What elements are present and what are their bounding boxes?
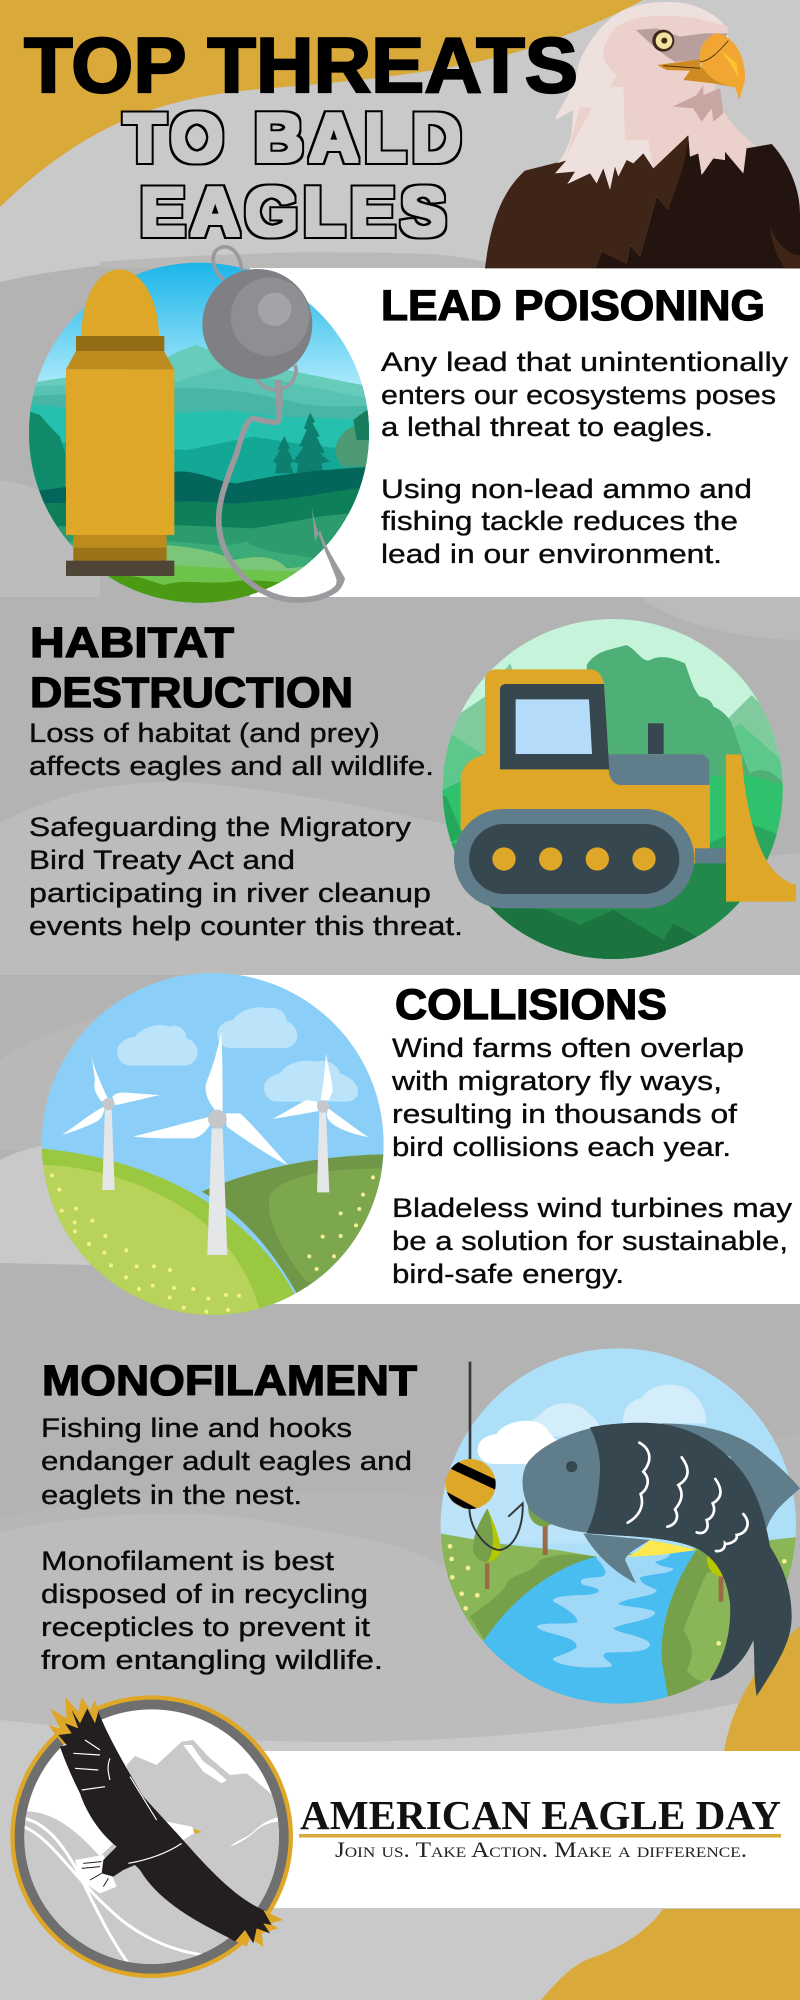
text block: recepticles to prevent it xyxy=(41,1612,371,1642)
text block: disposed of in recycling xyxy=(41,1579,368,1609)
illustration: lead bullet and sinker hook xyxy=(20,247,380,607)
heading: LEAD POISONING xyxy=(381,282,765,330)
turbine blades xyxy=(62,1033,369,1165)
wing highlights xyxy=(73,1740,182,1863)
text block: Bird Treaty Act and xyxy=(29,845,295,875)
fishing hook xyxy=(213,247,345,600)
text block: bird-safe energy. xyxy=(392,1259,624,1289)
logo: american eagle day emblem xyxy=(10,1695,293,1990)
name: AMERICAN EAGLE DAY xyxy=(300,1792,781,1838)
title line: eagles: EAGLES xyxy=(140,174,446,250)
gold shape bottom right xyxy=(541,1909,800,2000)
section: collisions xyxy=(391,981,793,1289)
text block: fishing tackle reduces the xyxy=(381,506,738,536)
text block: be a solution for sustainable, xyxy=(392,1226,788,1256)
text block: endanger adult eagles and xyxy=(41,1446,412,1476)
text block: eaglets in the nest. xyxy=(41,1480,302,1510)
text block: Using non-lead ammo and xyxy=(381,474,752,504)
illustration: fish and hook xyxy=(430,1340,800,1710)
text block: with migratory fly ways, xyxy=(391,1066,722,1096)
text block: lead in our environment. xyxy=(381,539,722,569)
soaring eagle xyxy=(58,1708,272,1943)
text block xyxy=(29,718,463,941)
bullet xyxy=(66,269,174,576)
white band: collisions xyxy=(210,975,800,1304)
illustration: bald eagle xyxy=(485,2,800,268)
tagline: Join us. Take Action. Make a difference. xyxy=(335,1837,747,1862)
text block xyxy=(41,1413,412,1675)
text block: a lethal threat to eagles. xyxy=(381,412,713,442)
section: lead poisoning xyxy=(381,282,789,569)
section: habitat destruction xyxy=(29,619,463,941)
title line: top threats: TOP THREATS xyxy=(24,21,578,109)
turbine towers xyxy=(102,1108,329,1255)
title xyxy=(24,21,578,250)
turbine hubs xyxy=(102,1098,329,1128)
text block: resulting in thousands of xyxy=(392,1099,738,1129)
text block: Safeguarding the Migratory xyxy=(29,812,412,842)
text block: Monofilament is best xyxy=(41,1546,335,1576)
text block: Wind farms often overlap xyxy=(392,1033,744,1063)
title line: to bald: TO BALD xyxy=(124,100,461,176)
illustration: bulldozer xyxy=(430,610,800,970)
lead sinker xyxy=(202,269,312,379)
eagle head xyxy=(167,1822,197,1840)
text block: Fishing line and hooks xyxy=(41,1413,352,1443)
text block: Any lead that unintentionally xyxy=(381,347,789,377)
text block xyxy=(391,1033,793,1289)
gold shape lower right xyxy=(724,1626,800,1751)
text block xyxy=(381,347,789,569)
fish xyxy=(523,1423,800,1696)
trees xyxy=(473,1503,725,1602)
text block: Bladeless wind turbines may xyxy=(392,1193,793,1223)
gold swoosh top xyxy=(0,0,643,207)
text block: Loss of habitat (and prey) xyxy=(29,718,380,748)
heading: COLLISIONS xyxy=(395,981,667,1029)
text block: from entangling wildlife. xyxy=(41,1645,383,1675)
white band: american eagle day xyxy=(250,1751,800,1908)
section: monofilament xyxy=(41,1357,417,1675)
text block: participating in river cleanup xyxy=(29,878,431,908)
heading: HABITAT xyxy=(30,619,234,667)
tail xyxy=(75,1855,117,1893)
american eagle day wordmark xyxy=(299,1792,781,1862)
emblem gold feather spikes xyxy=(48,1697,283,1947)
illustration: wind turbines xyxy=(42,973,384,1315)
heading: MONOFILAMENT xyxy=(42,1357,417,1405)
dozer body xyxy=(454,669,796,908)
bobber xyxy=(446,1459,496,1509)
text block: enters our ecosystems poses xyxy=(381,380,776,410)
fishing line and hook xyxy=(469,1362,523,1550)
text block: bird collisions each year. xyxy=(392,1132,731,1162)
text block: events help counter this threat. xyxy=(29,911,463,941)
white band: lead poisoning xyxy=(250,268,800,597)
gold rule xyxy=(299,1834,781,1838)
text block: affects eagles and all wildlife. xyxy=(29,751,434,781)
heading xyxy=(30,619,353,717)
heading: DESTRUCTION xyxy=(30,669,353,717)
